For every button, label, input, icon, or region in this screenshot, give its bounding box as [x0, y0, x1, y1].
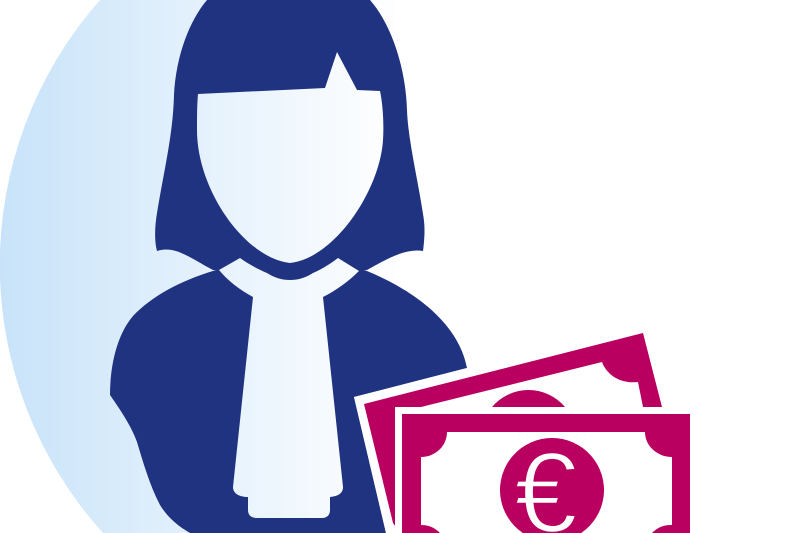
scarf: [219, 258, 359, 518]
back banknote: [354, 333, 700, 533]
icon: euro banknotes: [354, 333, 700, 533]
hair: [155, 0, 424, 290]
background circle: [0, 0, 420, 533]
banknote corner scallops: [421, 432, 447, 457]
face: [197, 52, 383, 263]
icon: woman: [110, 0, 467, 533]
euro coin: [500, 438, 604, 533]
back banknote euro disc: [492, 390, 565, 407]
body: [110, 262, 467, 533]
front banknote: [398, 410, 694, 533]
